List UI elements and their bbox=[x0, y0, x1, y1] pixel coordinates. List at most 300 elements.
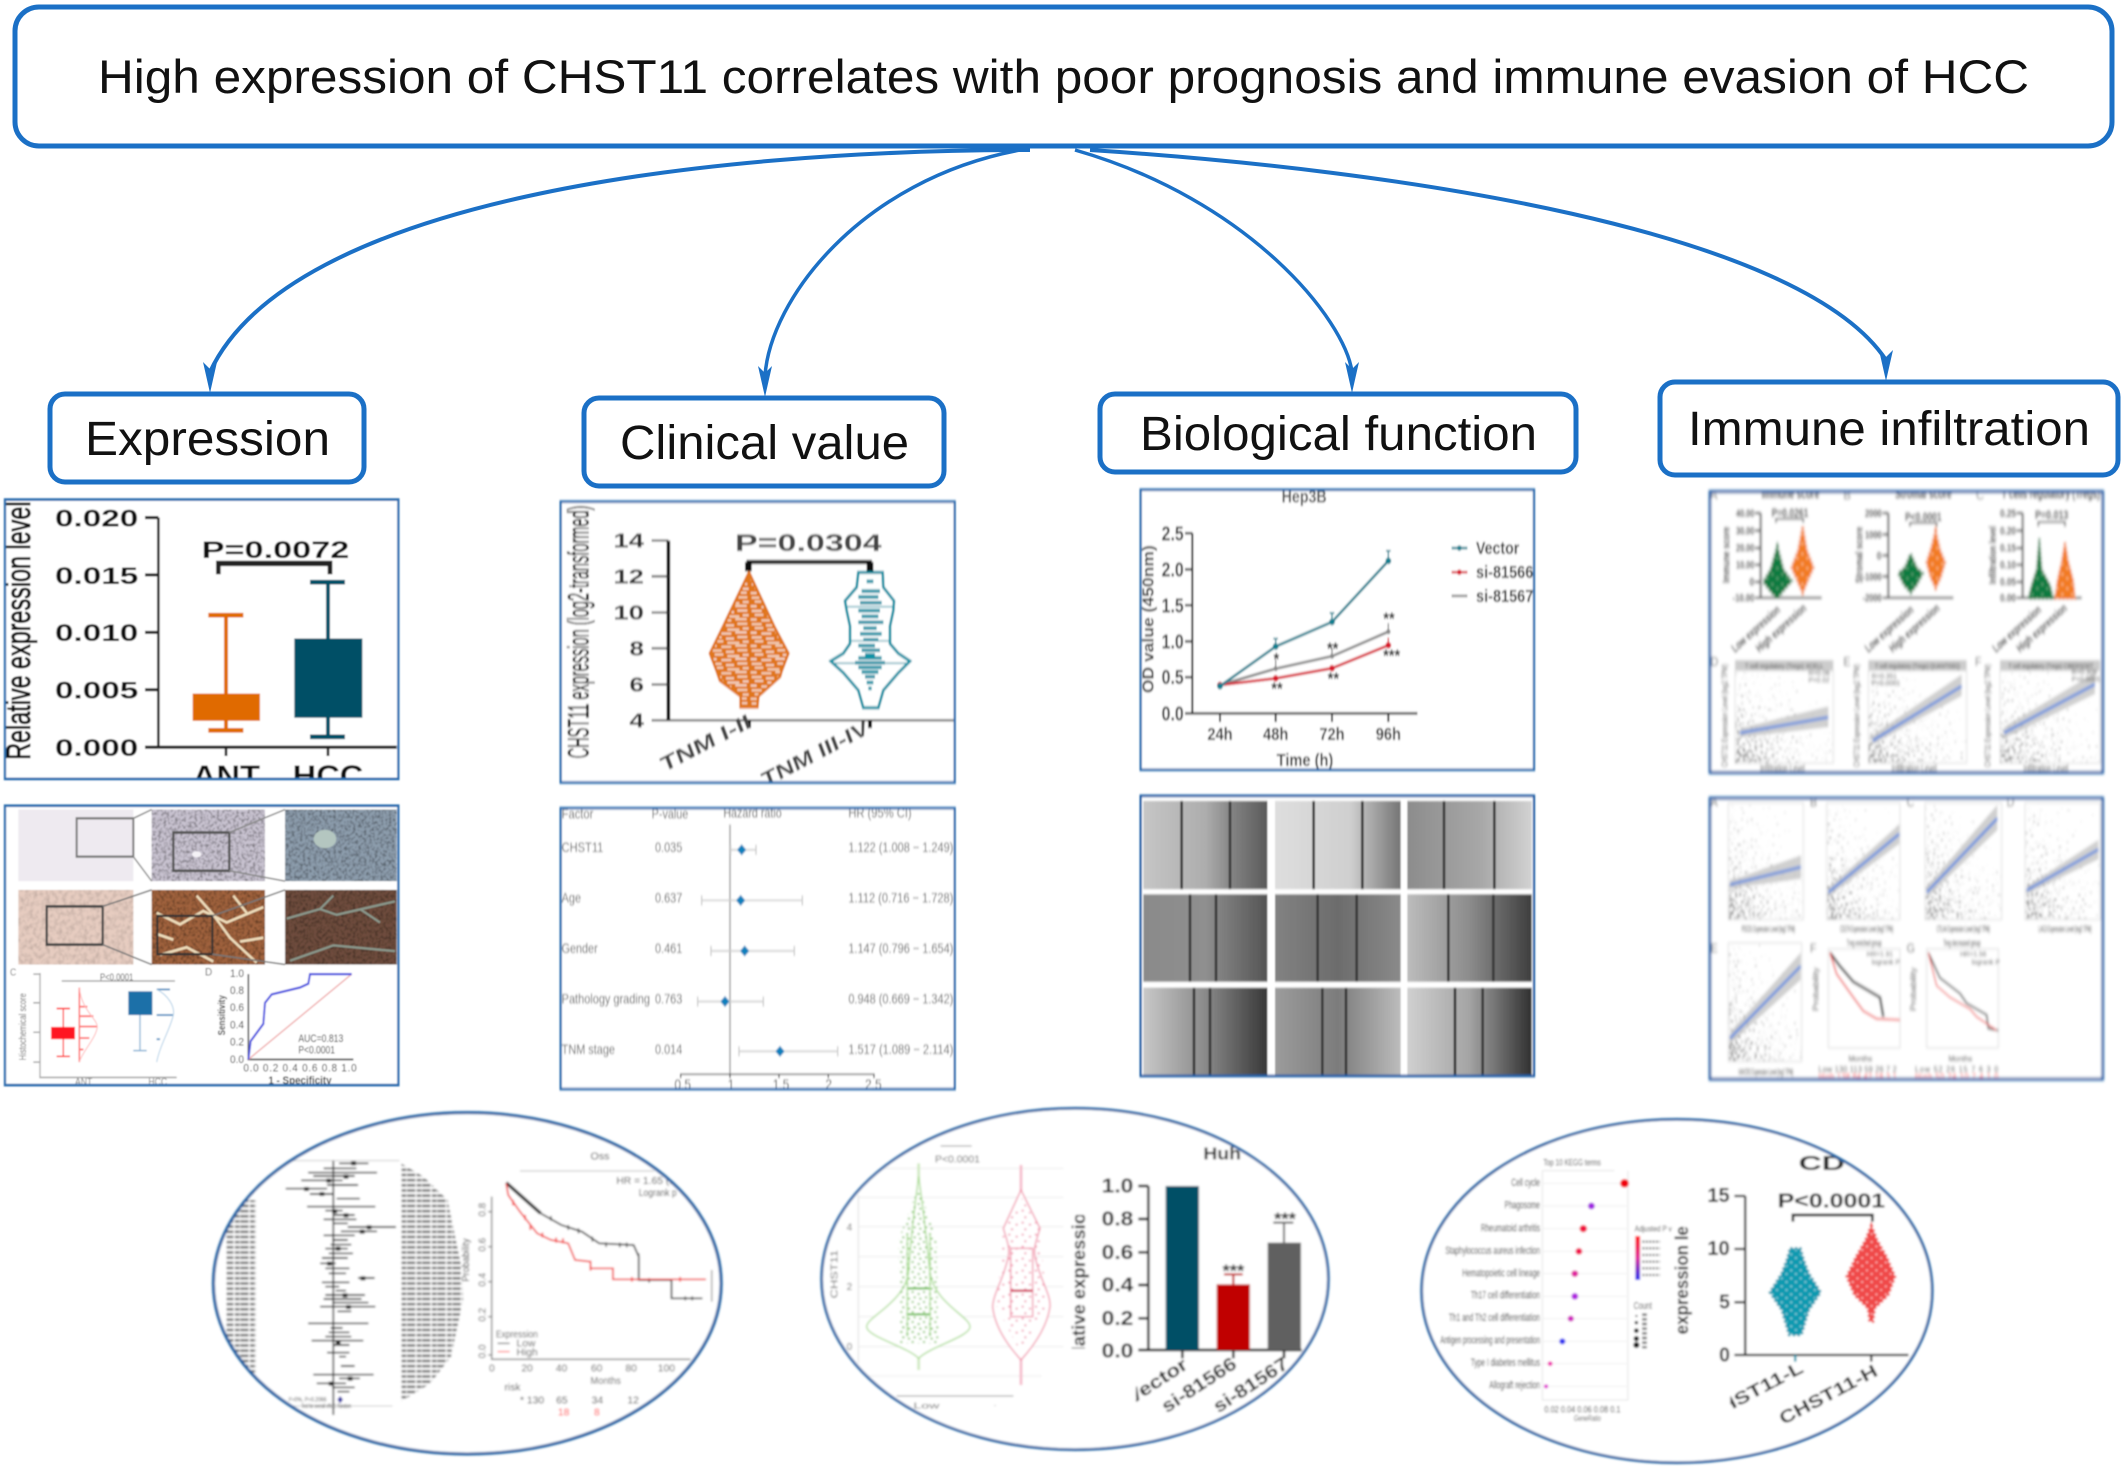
plot: T cells regulatory swarm: 0.10 bbox=[2000, 560, 2016, 572]
bar chart tick labels: 0.0 bbox=[1102, 1340, 1133, 1362]
forest row: Gender bbox=[562, 940, 953, 956]
forest row: Age: 0.637 bbox=[655, 889, 682, 906]
forest row: TNM stage: 0.014 bbox=[655, 1041, 682, 1057]
significance stars: ** bbox=[1327, 640, 1339, 659]
significance bracket bbox=[202, 537, 349, 574]
text: CHST11 expression (log2-transformed) bbox=[562, 506, 595, 758]
swarm y label: expression level bbox=[1672, 1203, 1692, 1334]
KEGG colour legend: Adjusted P v bbox=[1635, 1223, 1672, 1233]
bar: si-81566: *** bbox=[1222, 1260, 1245, 1281]
plot: T cells regulatory swarm: 0.00 bbox=[2000, 593, 2016, 605]
panel: immune checkpoint correlation and survival: CD274 Expression Level (log2 TPM) bbox=[1840, 923, 1893, 934]
bar chart tick labels: 1.0 bbox=[1102, 1176, 1133, 1198]
survival curve F: F bbox=[1810, 943, 1817, 956]
violin: TNM III-IV bbox=[831, 572, 910, 708]
wound row 3 bbox=[1143, 988, 1532, 1075]
scatter: Treg correlation F: CHST11 Expression Level (log2 TPM) bbox=[1982, 664, 1993, 767]
scatter: Treg correlation D: P=0.02 bbox=[1808, 675, 1830, 684]
plot: immune score swarm: Immune score bbox=[1762, 489, 1820, 502]
survival legend bbox=[496, 1329, 538, 1359]
survival curve G: logrank P bbox=[1972, 957, 2000, 966]
forest row: Gender: 0.461 bbox=[655, 940, 682, 956]
survival axes: 20 bbox=[521, 1364, 533, 1375]
ROC curve: 1 - Specificity bbox=[268, 1074, 332, 1087]
KEGG pathway labels: Th17 cell differentiation bbox=[1471, 1290, 1540, 1302]
plot: stromal score swarm: B bbox=[1843, 488, 1851, 503]
violin labels: 4 bbox=[847, 1223, 853, 1234]
survival curve F: Treg enriched group bbox=[1847, 937, 1882, 948]
forest row: CHST11: 1.122 (1.008 − 1.249) bbox=[848, 839, 953, 855]
panel: Hep3B proliferation line chart: 48h bbox=[1263, 726, 1288, 744]
scatter: checkpoint B: B bbox=[1810, 797, 1817, 810]
scatter: Treg correlation F: F bbox=[1975, 656, 1982, 669]
panel: Hep3B proliferation line chart: 24h bbox=[1207, 726, 1233, 744]
KEGG plot frame: Top 10 KEGG terms bbox=[1543, 1157, 1601, 1168]
plot: immune score swarm: Low expression bbox=[1730, 604, 1783, 656]
KEGG dots bbox=[1544, 1179, 1629, 1388]
scatter: Treg correlation D: R=0.06 bbox=[1808, 668, 1830, 678]
scatter: Treg correlation E: P<0.0001 bbox=[1872, 678, 1900, 688]
legend bbox=[1452, 540, 1533, 606]
plot: T cells regulatory swarm: T cells regulatory (Tregs) bbox=[2002, 489, 2100, 502]
plot: immune score swarm: 10.00 bbox=[1736, 560, 1755, 572]
ROC curve: 0.0 bbox=[230, 1053, 244, 1066]
tick labels: 2.5 bbox=[1162, 522, 1184, 545]
bar chart x labels bbox=[1122, 1353, 1292, 1417]
tick labels: 0.5 bbox=[1162, 666, 1184, 689]
bar: si-81566 bbox=[1217, 1260, 1250, 1350]
survival axes: 80 bbox=[625, 1364, 637, 1375]
survival curve G: Probability bbox=[1909, 967, 1918, 1011]
significance stars: ** bbox=[1271, 681, 1283, 699]
KEGG pathway labels: Antigen processing and presentation bbox=[1440, 1335, 1540, 1347]
swarm tick labels: 10 bbox=[1707, 1238, 1730, 1260]
survival legend: Low bbox=[517, 1339, 536, 1350]
heading: Immune infiltration bbox=[1660, 382, 2118, 475]
forest axis: 2.5 bbox=[865, 1076, 882, 1092]
series: Vector bbox=[1217, 551, 1391, 689]
x labels: TNM III-IV bbox=[759, 716, 872, 792]
significance bracket: P=0.0072 bbox=[202, 537, 349, 563]
panel: CHST11 violin plot by TNM stage bbox=[561, 502, 955, 792]
scatter: Treg correlation D bbox=[1711, 656, 1833, 774]
meta-analysis forest plot: Test for overall effect: Random bbox=[301, 1403, 351, 1410]
forest row: TNM stage: 1.517 (1.089 − 2.114) bbox=[848, 1041, 953, 1057]
survival header: HR = 1.65 (1 bbox=[616, 1176, 675, 1187]
KEGG size legend bbox=[1633, 1301, 1652, 1348]
plot: stromal score swarm: 2000 bbox=[1865, 508, 1882, 520]
scatter: Treg correlation F bbox=[1975, 656, 2100, 774]
plot: stromal score swarm: P<0.0001 bbox=[1905, 511, 1942, 524]
panel: IHC staining, box plot and ROC bbox=[5, 806, 398, 1087]
x labels bbox=[658, 713, 866, 784]
ROC curve: 0.0 0.2 0.4 0.6 0.8 1.0 bbox=[243, 1062, 357, 1075]
tick labels bbox=[1162, 522, 1184, 725]
heading: Biological function: Biological function bbox=[1140, 408, 1537, 461]
bar chart tick labels bbox=[1102, 1176, 1133, 1362]
violin labels: . bbox=[994, 1399, 996, 1408]
KEGG pathway labels bbox=[1440, 1177, 1540, 1392]
heading: Expression: Expression bbox=[85, 413, 330, 466]
swarm x labels: CHST11-H bbox=[1776, 1361, 1881, 1429]
plot: immune score swarm: 20.00 bbox=[1736, 543, 1755, 555]
swarm x labels bbox=[1701, 1358, 1881, 1429]
forest row: Gender: 1.147 (0.796 − 1.654) bbox=[848, 940, 953, 956]
plot: immune score swarm: P=0.0261 bbox=[1772, 507, 1808, 520]
numbers at risk: 18 bbox=[558, 1408, 570, 1419]
survival axes: Probability bbox=[461, 1237, 472, 1282]
tick labels: 10 bbox=[613, 601, 644, 624]
plot: T cells regulatory swarm bbox=[1976, 488, 2100, 656]
panel: Hep3B proliferation line chart: 72h bbox=[1319, 726, 1345, 744]
panel: forest plot of clinical factors bbox=[561, 805, 955, 1092]
scatter: checkpoint D: D bbox=[2007, 797, 2014, 810]
plot: T cells regulatory swarm: High expression bbox=[2015, 602, 2070, 656]
panel: expression box plot bbox=[0, 500, 398, 792]
significance bracket: P<0.0001 bbox=[1778, 1190, 1885, 1212]
forest row: CHST11: CHST11 bbox=[562, 839, 603, 855]
tick labels: 0.015 bbox=[55, 562, 138, 589]
KEGG pathway labels: Th1 and Th2 cell differentiation bbox=[1449, 1312, 1540, 1324]
forest axis bbox=[674, 1074, 882, 1092]
tick labels bbox=[55, 505, 138, 761]
tick labels: 12 bbox=[613, 565, 644, 588]
scatter: checkpoint A: A bbox=[1711, 797, 1718, 810]
legend: Vector bbox=[1476, 540, 1519, 558]
scatter: Treg correlation E: R=0.351 bbox=[1872, 671, 1897, 681]
violin: TNM I-II bbox=[710, 572, 788, 707]
scatter: checkpoint C: C bbox=[1907, 797, 1914, 810]
plot: stromal score swarm: 1000 bbox=[1865, 530, 1882, 542]
survival header bbox=[520, 1151, 677, 1199]
KEGG colour legend bbox=[1635, 1223, 1672, 1280]
scatter: Treg correlation E bbox=[1843, 656, 1967, 774]
survival axes: 0.2 bbox=[477, 1307, 489, 1322]
forest header bbox=[561, 808, 912, 822]
axes bbox=[145, 518, 397, 756]
arrow: title to Expression bbox=[203, 150, 1030, 393]
scatter: Treg correlation E: Infiltration Level bbox=[1892, 762, 1937, 774]
forest row: Age: 1.112 (0.716 − 1.728) bbox=[848, 889, 953, 906]
panel: ellipse with KEGG dot plot and swarm plot bbox=[1422, 1119, 1932, 1463]
KEGG plot frame: 0.02 0.04 0.06 0.08 0.1 bbox=[1544, 1403, 1620, 1414]
violin labels: 2 bbox=[847, 1282, 853, 1293]
scatter: Treg correlation F: P<0.0001 bbox=[2072, 674, 2100, 684]
bar chart tick labels: 0.4 bbox=[1102, 1275, 1133, 1297]
swarm: CHST11-L bbox=[1770, 1248, 1821, 1335]
wound row 1 bbox=[1143, 801, 1532, 889]
x labels: HCC bbox=[293, 759, 363, 792]
swarm: CHST11-H bbox=[1847, 1225, 1895, 1322]
scatter: checkpoint D bbox=[2007, 797, 2100, 934]
plot: stromal score swarm: Stromal score bbox=[1854, 527, 1865, 583]
survival curve G: HR=1.56 bbox=[1960, 949, 1986, 959]
swarm tick labels: 15 bbox=[1707, 1185, 1730, 1207]
expression score box plot: HCC bbox=[148, 1077, 167, 1087]
plot: stromal score swarm: Low expression bbox=[1863, 604, 1916, 656]
forest row: TNM stage: TNM stage bbox=[562, 1041, 615, 1057]
forest axis: 0.5 bbox=[674, 1076, 691, 1092]
scatter: Treg correlation D: T cell regulatory (Tregs) XCELL bbox=[1745, 661, 1823, 670]
KEGG pathway labels: Rheumatoid arthritis bbox=[1481, 1222, 1540, 1234]
survival curve: high expression bbox=[506, 1183, 706, 1282]
plot: T cells regulatory swarm: P=0.013 bbox=[2035, 509, 2068, 522]
arrow: title to Clinical value bbox=[758, 150, 1020, 397]
plot: T cells regulatory swarm: C bbox=[1976, 488, 1984, 503]
survival axes: 0 bbox=[489, 1364, 495, 1375]
tick labels: 4 bbox=[629, 709, 645, 732]
tick labels: 8 bbox=[629, 637, 644, 660]
ROC curve: 0.4 bbox=[230, 1019, 244, 1032]
arrow: title to Immune infiltration bbox=[1090, 150, 1893, 381]
forest row: Pathology grading: Pathology grading bbox=[562, 991, 650, 1007]
ROC curve: 0.6 bbox=[230, 1002, 244, 1014]
ROC curve: AUC=0.813 bbox=[298, 1032, 343, 1045]
plot: immune score swarm: 30.00 bbox=[1736, 526, 1755, 538]
tick labels: 1.0 bbox=[1162, 630, 1184, 653]
scatter: Treg correlation D: D bbox=[1711, 656, 1718, 669]
plot: immune score swarm: 0 bbox=[1749, 577, 1755, 589]
scatter: Treg correlation F: R=0.309 bbox=[2072, 667, 2097, 677]
scatter: checkpoint B bbox=[1810, 797, 1900, 934]
survival curve F: Probability bbox=[1811, 967, 1820, 1011]
survival curve: low expression bbox=[506, 1183, 702, 1300]
plot: immune score swarm: 40.00 bbox=[1736, 508, 1755, 520]
series: si-81567 bbox=[1220, 623, 1390, 685]
swarm x labels: CHST11-L bbox=[1701, 1358, 1806, 1425]
ROC curve: 0.8 bbox=[230, 984, 244, 997]
swarm axes bbox=[1734, 1196, 1909, 1362]
KEGG pathway labels: Type I diabetes mellitus bbox=[1471, 1357, 1540, 1369]
numbers at risk: 8 bbox=[594, 1408, 600, 1419]
expression score box plot bbox=[10, 967, 177, 1087]
box: HCC bbox=[294, 582, 362, 737]
violin labels: 0 bbox=[847, 1342, 853, 1353]
heading: Clinical value: Clinical value bbox=[620, 417, 909, 470]
forest axis: 1 bbox=[728, 1076, 734, 1092]
numbers at risk: 65 bbox=[556, 1395, 568, 1406]
tick labels: 2.0 bbox=[1162, 558, 1184, 581]
survival curve F: HR=1.91 bbox=[1867, 949, 1893, 959]
violin labels bbox=[829, 1146, 996, 1410]
ROC curve: 1.0 bbox=[230, 967, 244, 980]
panel: wound healing micrographs bbox=[1141, 796, 1534, 1076]
survival axes: 40 bbox=[556, 1364, 568, 1375]
plot: stromal score swarm: Stromal score bbox=[1895, 489, 1952, 502]
numbers at risk: * 130 bbox=[520, 1395, 544, 1406]
expression score box plot: P<0.0001 bbox=[100, 972, 133, 983]
heading: Biological function bbox=[1100, 394, 1576, 472]
survival legend: Expression bbox=[496, 1329, 538, 1340]
scatter: Treg correlation E: T cell regulatory (Tregs) QUANTISEQ bbox=[1875, 661, 1960, 670]
hazard ratio text columns bbox=[401, 1163, 463, 1402]
plot: immune score swarm: Immune score bbox=[1721, 527, 1732, 583]
bar chart axes bbox=[1138, 1186, 1302, 1358]
title box: High expression of CHST11 correlates with poor prognosis and immune evasion of HCC bbox=[98, 50, 2029, 103]
violin labels: Low bbox=[913, 1401, 940, 1410]
tick labels: 0.0 bbox=[1162, 702, 1184, 725]
survival curve G: Low 52 26 15 7 6 3 0 bbox=[1915, 1065, 1999, 1074]
survival axes: 0.6 bbox=[477, 1237, 489, 1252]
plot: T cells regulatory swarm: 0.20 bbox=[2000, 526, 2016, 538]
significance bracket bbox=[735, 530, 882, 571]
survival axes: 100 bbox=[658, 1364, 675, 1375]
panel: ellipse with expression violin and bar chart bbox=[822, 1108, 1328, 1450]
plot: T cells regulatory swarm: Infiltration level bbox=[1988, 526, 1999, 584]
survival curve F: Months bbox=[1848, 1054, 1872, 1064]
tick labels: 0.000 bbox=[55, 735, 138, 761]
ROC curve: Sensitivity bbox=[217, 995, 228, 1035]
scatter: Treg correlation E: CHST11 Expression Level (log2 TPM) bbox=[1851, 664, 1861, 767]
bar chart tick labels: 0.2 bbox=[1102, 1308, 1133, 1330]
forest header: Hazard ratio bbox=[723, 805, 782, 821]
survival curve G bbox=[1907, 937, 2000, 1081]
plot: immune score swarm: High expression bbox=[1754, 602, 1809, 656]
series: si-81566 bbox=[1217, 638, 1391, 688]
tick labels: 0.010 bbox=[55, 620, 138, 646]
survival curve G: Treg decreased group bbox=[1943, 937, 1981, 948]
violin: high group bbox=[993, 1165, 1050, 1385]
ROC curve: 0.2 bbox=[230, 1036, 244, 1049]
forest axis: 1.5 bbox=[773, 1076, 789, 1092]
plot: T cells regulatory swarm: 0.15 bbox=[2000, 543, 2016, 555]
forest row: Pathology grading bbox=[562, 991, 953, 1007]
plot: stromal score swarm: 0 bbox=[1877, 551, 1882, 563]
bar: Vector bbox=[1166, 1186, 1199, 1350]
bar chart x labels: si-81567 bbox=[1209, 1353, 1292, 1417]
survival axes: 0.8 bbox=[477, 1202, 489, 1217]
plot: immune score swarm: A bbox=[1710, 488, 1718, 503]
meta-analysis forest plot bbox=[286, 1160, 399, 1415]
tick labels: 0.005 bbox=[55, 677, 138, 704]
swarm tick labels bbox=[1707, 1185, 1730, 1366]
survival curve F bbox=[1810, 937, 1900, 1081]
numbers at risk bbox=[504, 1383, 639, 1419]
survival curve G: High 50 24 10 7 4 1 0 bbox=[1915, 1072, 1999, 1081]
panel: immune checkpoint correlation and survival bbox=[1710, 797, 2103, 1081]
forest row: Pathology grading: 0.948 (0.669 − 1.342) bbox=[848, 991, 953, 1007]
plot: T cells regulatory swarm: Low expression bbox=[1991, 604, 2044, 656]
forest axis: 2 bbox=[825, 1076, 832, 1092]
survival axes: Months bbox=[591, 1376, 621, 1387]
axes bbox=[1185, 533, 1417, 722]
significance bracket: P=0.0304 bbox=[735, 530, 882, 556]
survival legend: High bbox=[517, 1348, 538, 1359]
KEGG pathway labels: Cell cycle bbox=[1511, 1177, 1540, 1189]
bar chart tick labels: 0.8 bbox=[1102, 1209, 1133, 1231]
scatter: Treg correlation E: E bbox=[1843, 656, 1851, 669]
scatter: checkpoint A bbox=[1711, 797, 1803, 934]
tick labels: 6 bbox=[629, 673, 644, 696]
heading: Immune infiltration: Immune infiltration bbox=[1688, 403, 2090, 456]
significance stars: ** bbox=[1328, 671, 1340, 689]
plot: stromal score swarm: -2000 bbox=[1863, 593, 1882, 605]
forest row: CHST11 bbox=[562, 839, 953, 855]
x labels bbox=[196, 764, 363, 779]
panel: immune scores and Treg correlation bbox=[1710, 488, 2103, 774]
plot: stromal score swarm bbox=[1843, 488, 1953, 656]
meta-analysis forest plot: I²=0%, P=0.2066 bbox=[289, 1396, 327, 1403]
survival header: Logrank p bbox=[639, 1188, 677, 1199]
arrow: title to Biological function bbox=[1075, 150, 1359, 393]
survival curve G: G bbox=[1907, 943, 1915, 956]
plot: T cells regulatory swarm: 0.25 bbox=[2000, 508, 2016, 520]
survival curve F: Low 130 113 59 26 7 2 bbox=[1818, 1065, 1897, 1074]
grid and axes bbox=[858, 1168, 1063, 1376]
ROC curve: P<0.0001 bbox=[298, 1044, 335, 1057]
forest row: Pathology grading: 0.763 bbox=[655, 991, 682, 1007]
significance stars bbox=[1271, 611, 1401, 699]
forest row: Age bbox=[562, 889, 953, 906]
heading: Clinical value bbox=[584, 398, 944, 486]
ROC curve bbox=[205, 966, 357, 1087]
scatter: checkpoint C: CTLA4 Expression Level (log2 TPM) bbox=[1937, 923, 1990, 934]
ROC curve: D bbox=[205, 966, 212, 978]
survival curve F: logrank P bbox=[1872, 957, 1900, 966]
bar chart title: Huh7 bbox=[1203, 1143, 1252, 1163]
KEGG plot frame bbox=[1542, 1157, 1628, 1423]
violin labels: CHST11 bbox=[829, 1249, 840, 1298]
forest header: P-value bbox=[652, 806, 688, 822]
plot: immune score swarm: -10.00 bbox=[1733, 593, 1755, 605]
axes bbox=[666, 539, 672, 721]
scatter: Treg correlation D: Infiltration Level bbox=[1760, 762, 1805, 774]
KEGG size legend: Count bbox=[1634, 1301, 1652, 1312]
survival curve G: Months bbox=[1948, 1054, 1972, 1064]
study labels column bbox=[227, 1200, 256, 1375]
survival curve F: High 138 84 42 18 3 1 bbox=[1818, 1072, 1897, 1081]
tick labels: 1.5 bbox=[1162, 594, 1184, 617]
forest row: Gender: Gender bbox=[562, 940, 598, 956]
expression score box plot: C bbox=[10, 967, 17, 977]
panel: Hep3B proliferation line chart: 96h bbox=[1376, 726, 1401, 744]
panel: immune checkpoint correlation and survival: PDCD1 Expression Level (log2 TPM) bbox=[1742, 923, 1795, 934]
forest header: HR (95% CI) bbox=[848, 805, 912, 821]
survival axes: 0.4 bbox=[477, 1272, 489, 1287]
swarm tick labels: 0 bbox=[1719, 1344, 1730, 1366]
bar chart tick labels: 0.6 bbox=[1102, 1242, 1133, 1264]
survival header: Oss bbox=[591, 1151, 610, 1162]
legend: si-81567 bbox=[1476, 588, 1533, 606]
IHC micrographs bbox=[18, 810, 397, 965]
bar: si-81567 bbox=[1268, 1209, 1301, 1350]
numbers at risk: 34 bbox=[592, 1395, 603, 1406]
box: ANT bbox=[193, 615, 260, 730]
forest row: TNM stage bbox=[562, 1041, 953, 1057]
plot: immune score swarm bbox=[1710, 488, 1822, 656]
numbers at risk: risk bbox=[504, 1383, 521, 1394]
forest row: CHST11: 0.035 bbox=[655, 839, 682, 855]
panel: immune checkpoint correlation and survival: HAVCR2 Expression Level (log2 TPM) bbox=[1738, 1067, 1793, 1077]
tick labels: 0.020 bbox=[55, 505, 138, 532]
tick labels bbox=[613, 529, 645, 732]
significance stars: ** bbox=[1383, 611, 1395, 629]
panel: Hep3B proliferation line chart: OD value (450nm) bbox=[1140, 545, 1157, 693]
KEGG pathway labels: Allograft rejection bbox=[1489, 1380, 1540, 1392]
survival axes: 0.0 bbox=[477, 1344, 489, 1358]
legend: si-81566 bbox=[1476, 564, 1533, 582]
violin labels: P<0.0001 bbox=[935, 1155, 980, 1166]
expression score box plot: Histochemical score bbox=[18, 993, 29, 1060]
significance stars: * bbox=[1273, 651, 1280, 669]
scatter: Treg correlation D: CHST11 Expression Level (log2 TPM) bbox=[1719, 664, 1729, 767]
x labels: TNM I-II bbox=[658, 710, 754, 777]
survival axes bbox=[461, 1197, 690, 1387]
plot: stromal score swarm: -1000 bbox=[1863, 572, 1882, 584]
tick labels: 14 bbox=[613, 529, 645, 552]
KEGG pathway labels: Hematopoietic cell lineage bbox=[1462, 1267, 1540, 1279]
bar chart x labels: si-81566 bbox=[1157, 1353, 1240, 1417]
